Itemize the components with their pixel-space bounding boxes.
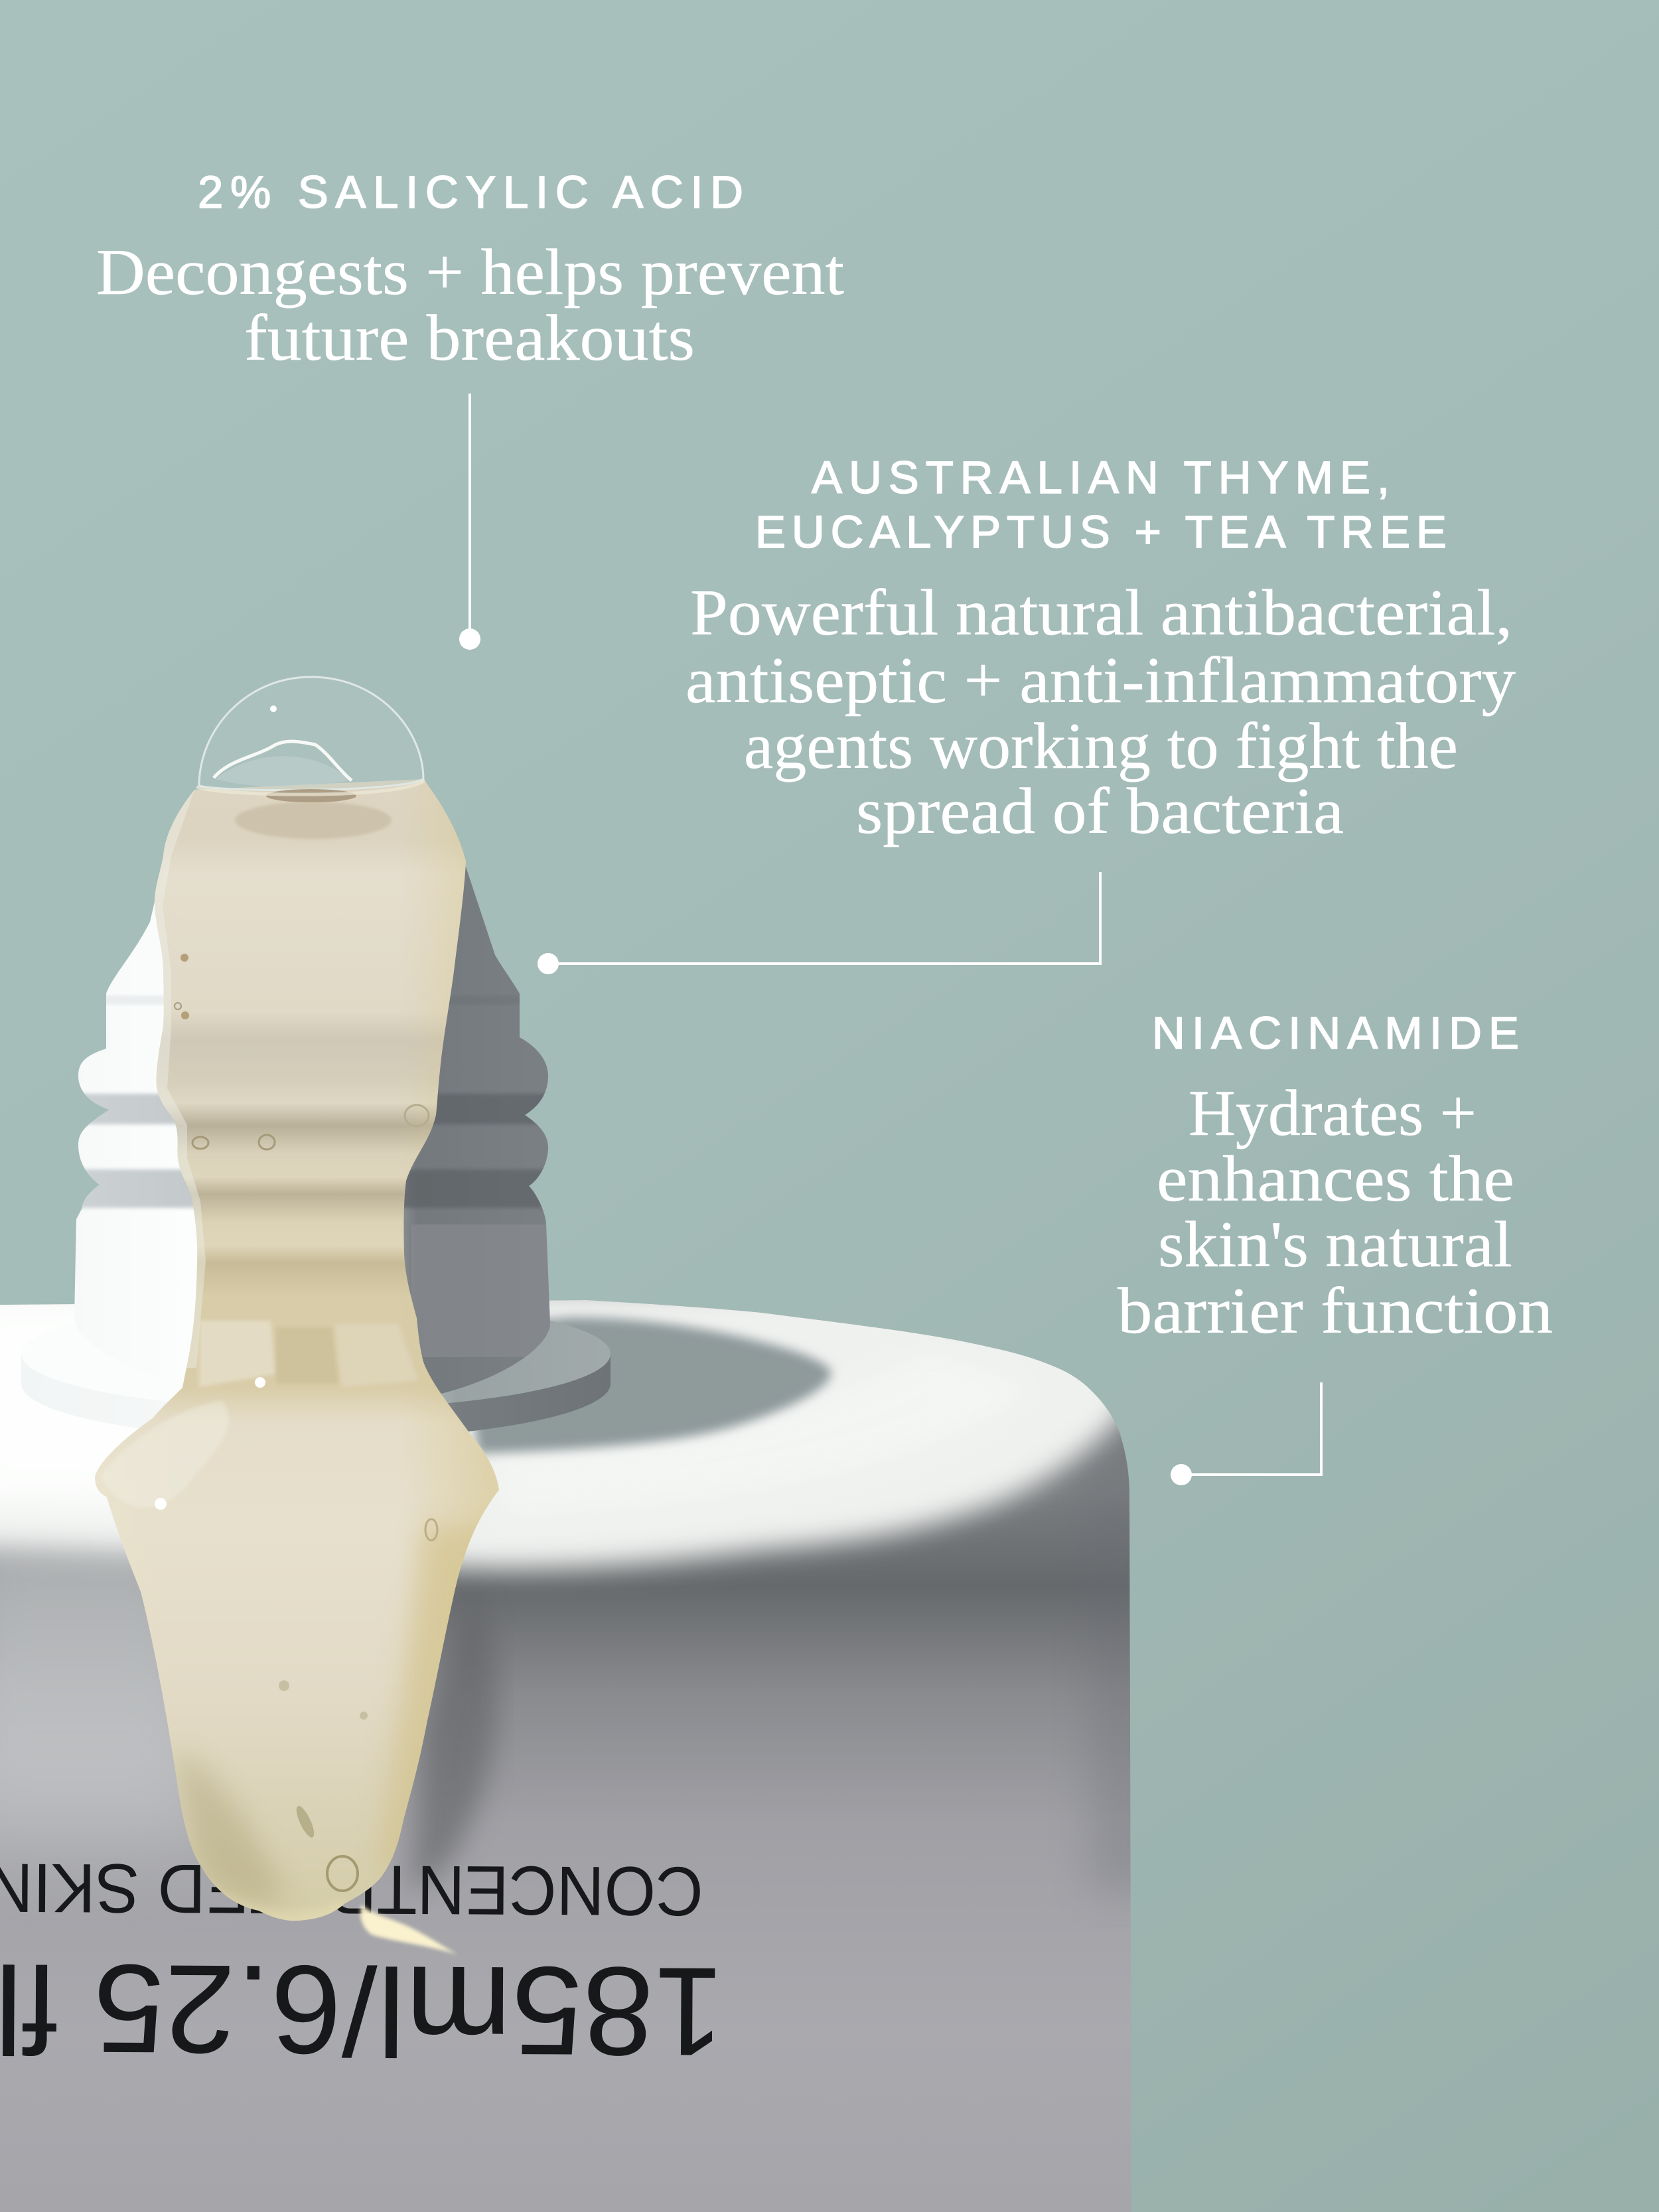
- description: spread of bacteria: [856, 775, 1344, 848]
- clear droplet bubble on top: [196, 677, 425, 802]
- callout: australian thyme, eucalyptus + tea tree: [538, 452, 1516, 974]
- description: [96, 236, 844, 374]
- heading: [755, 452, 1447, 557]
- description: barrier function: [1118, 1275, 1553, 1347]
- shadow beside drip: [411, 1586, 497, 1891]
- cast shadow on shoulder: [465, 1317, 831, 1453]
- description: agents working to fight the: [744, 710, 1458, 782]
- serum flowing over nozzle and dripping: [95, 779, 504, 1931]
- bottle body: [0, 1288, 1168, 2212]
- heading: EUCALYPTUS + TEA TREE: [755, 506, 1447, 557]
- heading: NIACINAMIDE: [1152, 1007, 1519, 1059]
- callout: niacinamide: [1118, 1007, 1553, 1485]
- bubble: lower reflection: [216, 756, 350, 787]
- leader line: [1171, 1382, 1321, 1485]
- serum: glaze on shoulder: [100, 1400, 229, 1508]
- description: Powerful natural antibacterial,: [690, 577, 1512, 649]
- shoulder: bright lip highlight: [491, 1354, 1035, 1513]
- heading: AUSTRALIAN THYME,: [812, 452, 1390, 503]
- collar disk: [21, 1299, 611, 1439]
- description: Decongests + helps prevent: [96, 236, 844, 309]
- bubble: nozzle opening: [266, 789, 356, 802]
- serum: olive bottom shading: [176, 1752, 285, 1903]
- leader line: [459, 394, 480, 650]
- serum: inner shadow under hole: [235, 802, 392, 839]
- bottle label text: [0, 1848, 725, 2082]
- heading: 2% SALICYLIC ACID: [198, 167, 743, 218]
- leader line: [538, 872, 1100, 974]
- light glint under drip: [360, 1905, 458, 1954]
- description: antiseptic + anti-inflammatory: [685, 644, 1516, 717]
- description: enhances the: [1157, 1143, 1514, 1215]
- nozzle with threads: [66, 783, 557, 1420]
- description: [1118, 1077, 1553, 1347]
- photo: white product bottle: [0, 677, 1168, 2212]
- description: [685, 577, 1516, 848]
- bubble: inner wave: [214, 741, 352, 780]
- serum: translucent left edge: [155, 790, 206, 1368]
- description: future breakouts: [244, 302, 695, 374]
- serum: underside tabs: [199, 1321, 418, 1387]
- serum: specks and air bubbles: [155, 954, 437, 1891]
- description: Hydrates +: [1189, 1077, 1477, 1149]
- callout: 2% salicylic acid: [96, 167, 844, 650]
- label: volume: 185ml/6.25 fl: [0, 1937, 725, 2082]
- description: skin's natural: [1158, 1209, 1512, 1281]
